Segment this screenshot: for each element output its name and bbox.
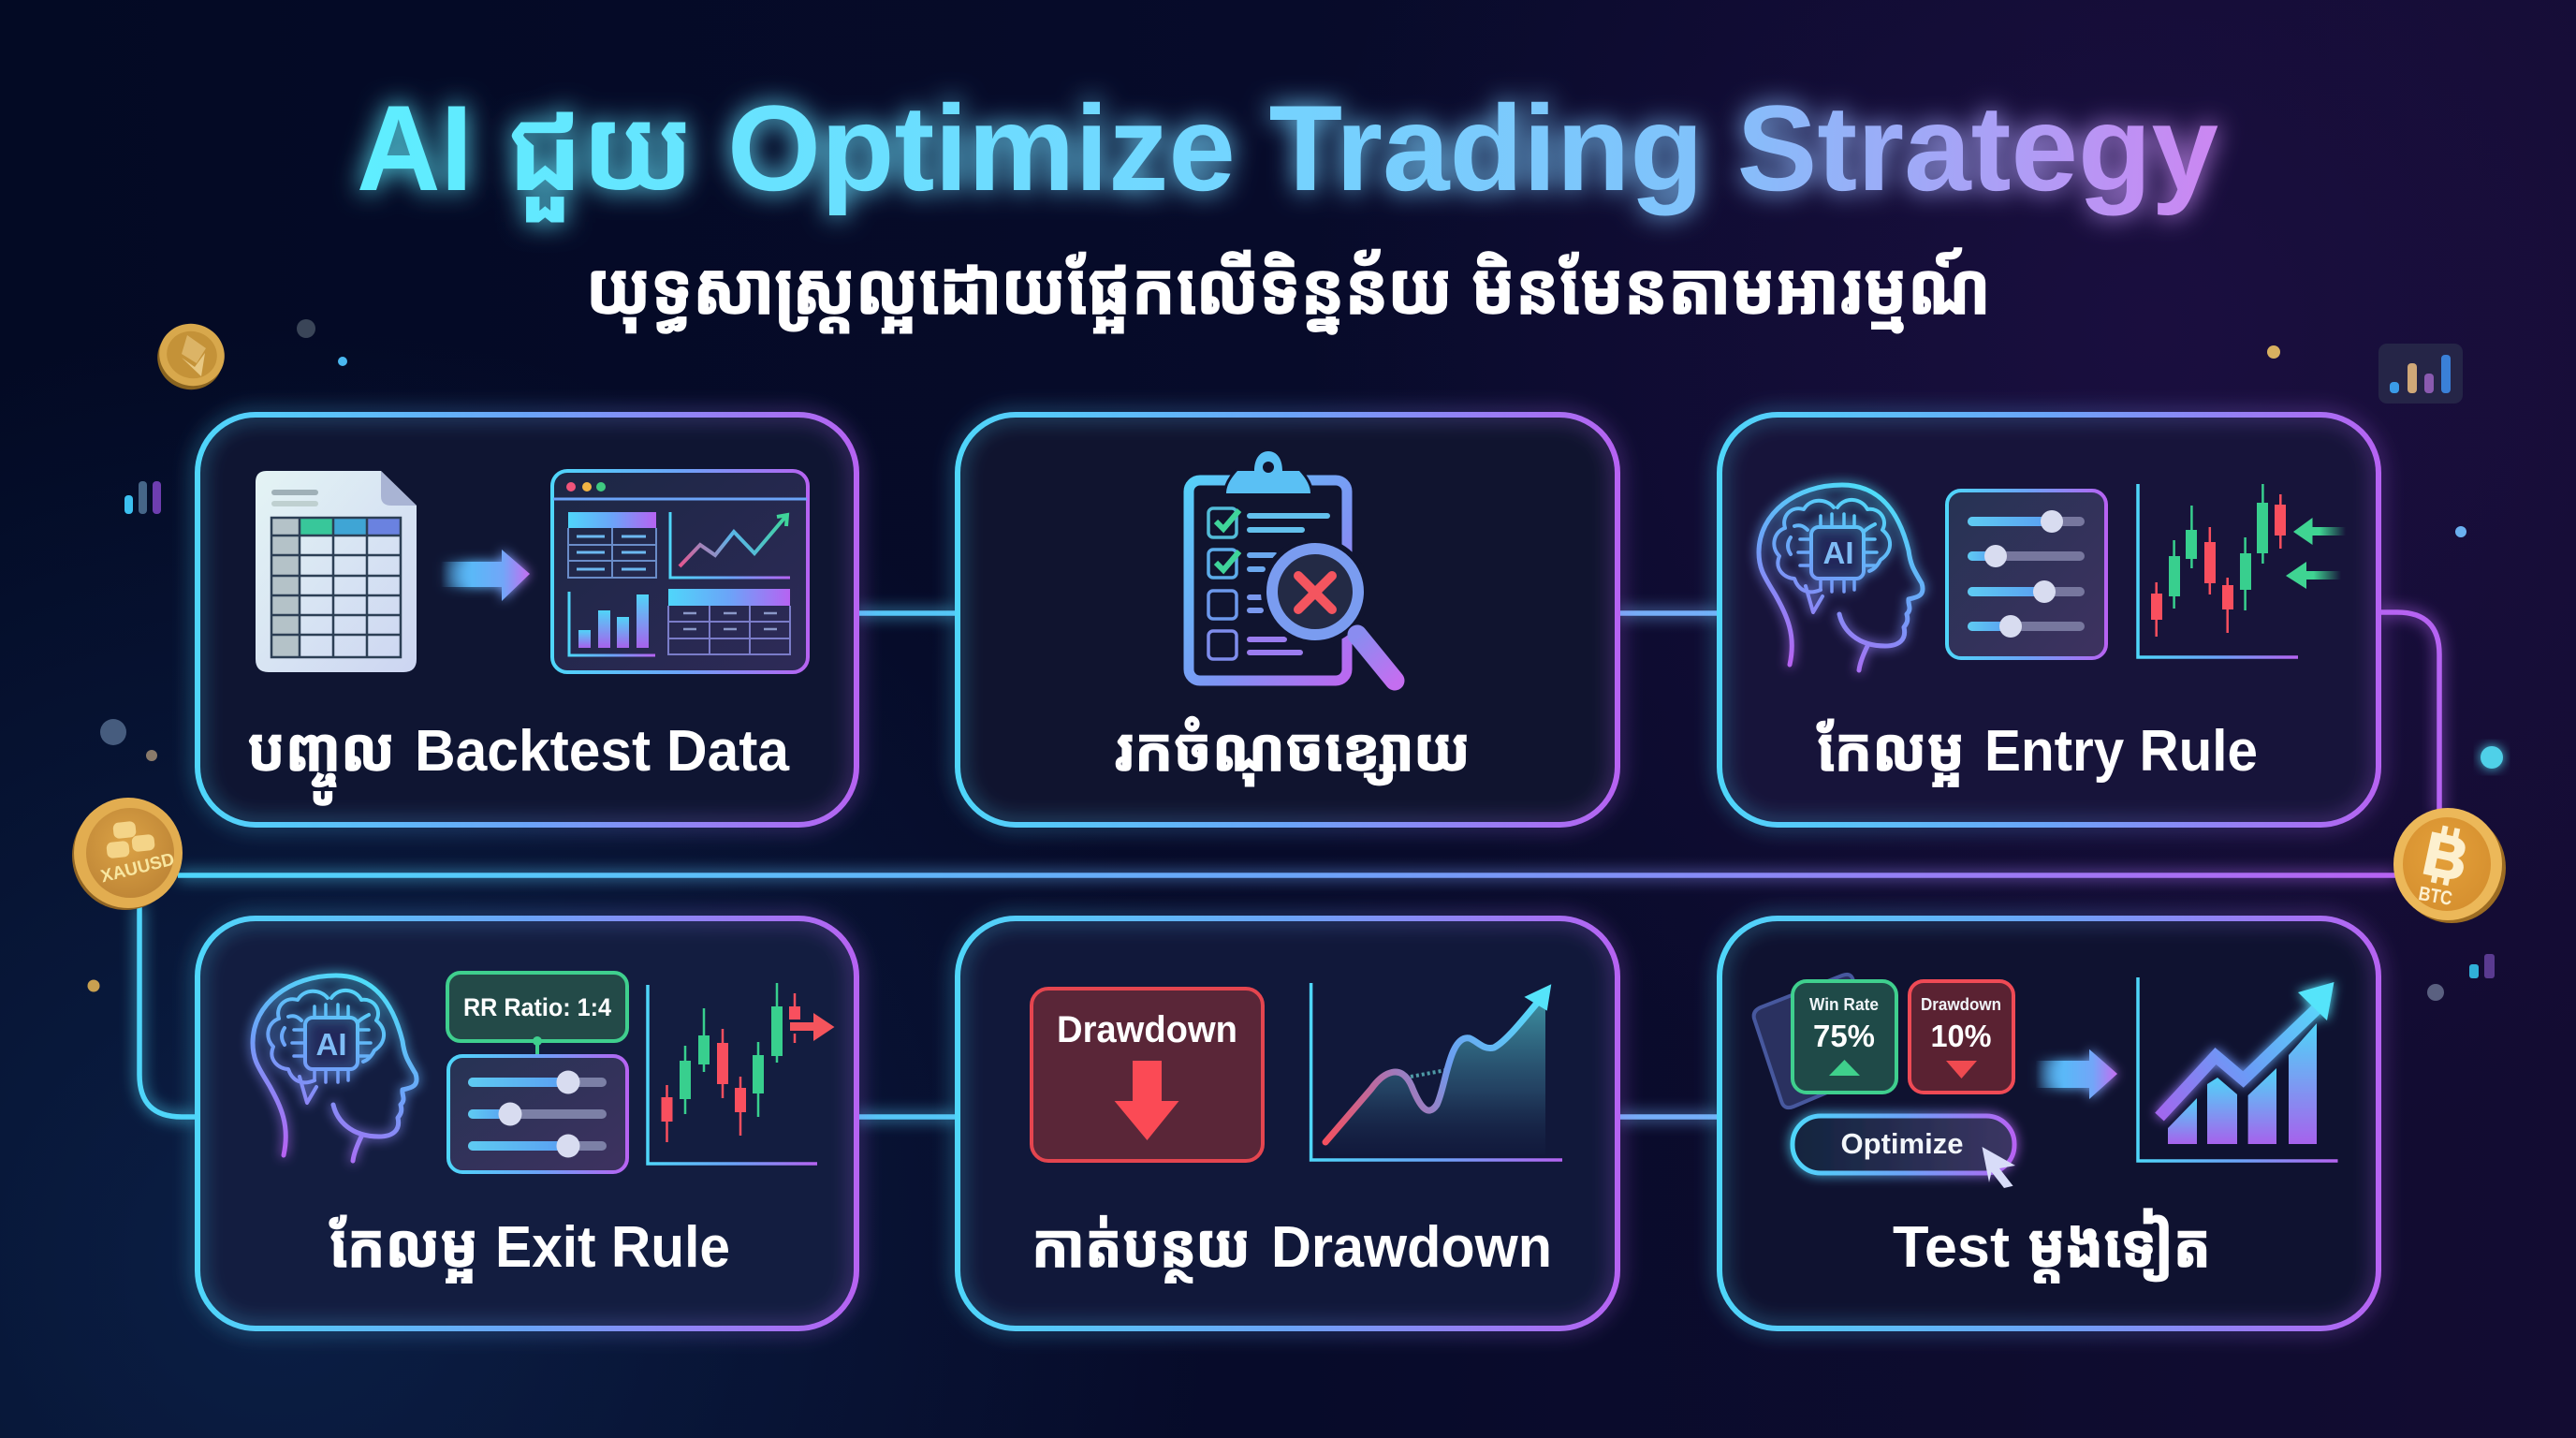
step 4 label: កែលម្អ [329, 1212, 478, 1284]
card: win rate: 75% [1813, 1019, 1875, 1053]
card: win rate [1793, 981, 1896, 1093]
subtitle: យុទ្ធសាស្រ្តល្អដោយផ្អែកលើទិន្នន័យ មិនមែនតាមអារម្មណ៍ [587, 247, 1991, 335]
step 1 label: បញ្ចូល [247, 716, 395, 805]
step 5 label [1032, 1212, 1552, 1284]
card: drawdown [1910, 981, 2013, 1093]
icon: AI head: AI [1823, 536, 1853, 570]
connector: XAUUSD coin to step 4 [139, 903, 198, 1117]
step 4 label: Exit Rule [495, 1215, 730, 1280]
button: optimize with cursor [1793, 1116, 2015, 1188]
coin: XAUUSD: XAUUSD [99, 850, 177, 887]
connector: long line BTC to XAUUSD [178, 873, 2396, 878]
icon: AI head: AI [316, 1027, 346, 1062]
decoration: right floating dots [2267, 345, 2503, 1001]
card: win rate: Win Rate [1809, 995, 1879, 1014]
icon: dashboard window [552, 471, 808, 672]
icon: AI head [1759, 485, 1923, 670]
callout: drawdown down arrow: Drawdown [1057, 1009, 1237, 1050]
step 4 label [329, 1212, 730, 1284]
panel: step 5 cut drawdown [958, 918, 1617, 1328]
icon: spreadsheet document [256, 471, 417, 672]
decoration: left mini bars [124, 481, 161, 514]
step 6 label: Test [1893, 1215, 2010, 1280]
panel: step 2 find weak points [958, 415, 1617, 825]
callout: RR ratio: RR Ratio: 1:4 [463, 993, 611, 1021]
panel: step 6 test again [1720, 918, 2378, 1328]
arrow: result flow [2036, 1049, 2117, 1099]
icon: AI head [253, 976, 417, 1161]
chart: candlesticks with entry arrows [2138, 484, 2346, 657]
icon: sliders [1947, 491, 2106, 658]
step 3 label [1817, 716, 2258, 787]
step 1 label [247, 716, 789, 805]
coin: BTC: B [2418, 819, 2474, 894]
icon: clipboard with magnifier [1189, 451, 1395, 681]
card: drawdown: 10% [1930, 1019, 1992, 1053]
step 6 label: ម្តងទៀត [2027, 1209, 2211, 1284]
step 3 label: Entry Rule [1984, 719, 2258, 784]
connector: step 3 to BTC coin [2378, 612, 2439, 814]
title: AI [357, 80, 473, 216]
icon: tilted back card [1754, 975, 1865, 1108]
title: ជួយ [505, 86, 695, 223]
panel: step 3 entry rule [1720, 415, 2378, 825]
arrow: data flow [441, 550, 530, 601]
step 6 label [1893, 1209, 2211, 1284]
step 2 label: រកចំណុចខ្សោយ [1114, 716, 1471, 787]
chart: rising bars with arrow [2138, 977, 2338, 1161]
coin: BTC [2393, 808, 2506, 923]
step 5 label: កាត់បន្ថយ [1032, 1212, 1251, 1284]
button: optimize with cursor: Optimize [1840, 1127, 1964, 1160]
step 3 label: កែលម្អ [1817, 716, 1965, 787]
panel: step 1 backtest data [198, 415, 856, 825]
decoration: right bar chart badge [2378, 344, 2463, 404]
step 1 label: Backtest Data [415, 719, 789, 784]
decoration: left floating dots [88, 319, 347, 992]
connector: step 2 to 3 [1617, 610, 1720, 616]
title: Optimize Trading Strategy [727, 80, 2218, 216]
chart: candlesticks with exit arrow [648, 983, 835, 1164]
icon: sliders [448, 1056, 627, 1172]
card: drawdown: Drawdown [1921, 995, 2001, 1014]
chart: equity curve with smaller drawdown [1311, 983, 1562, 1160]
coin: ethereum [150, 315, 232, 398]
callout: RR ratio [447, 973, 627, 1056]
coin: BTC: BTC [2417, 883, 2453, 910]
connector: step 1 to 2 [856, 610, 959, 616]
connector: step 4 to 5 [856, 1114, 959, 1120]
panel: step 4 exit rule [198, 918, 856, 1328]
step 5 label: Drawdown [1271, 1215, 1552, 1280]
coin: XAUUSD [72, 798, 183, 910]
connector: step 5 to 6 [1617, 1114, 1720, 1120]
callout: drawdown down arrow [1032, 989, 1263, 1161]
